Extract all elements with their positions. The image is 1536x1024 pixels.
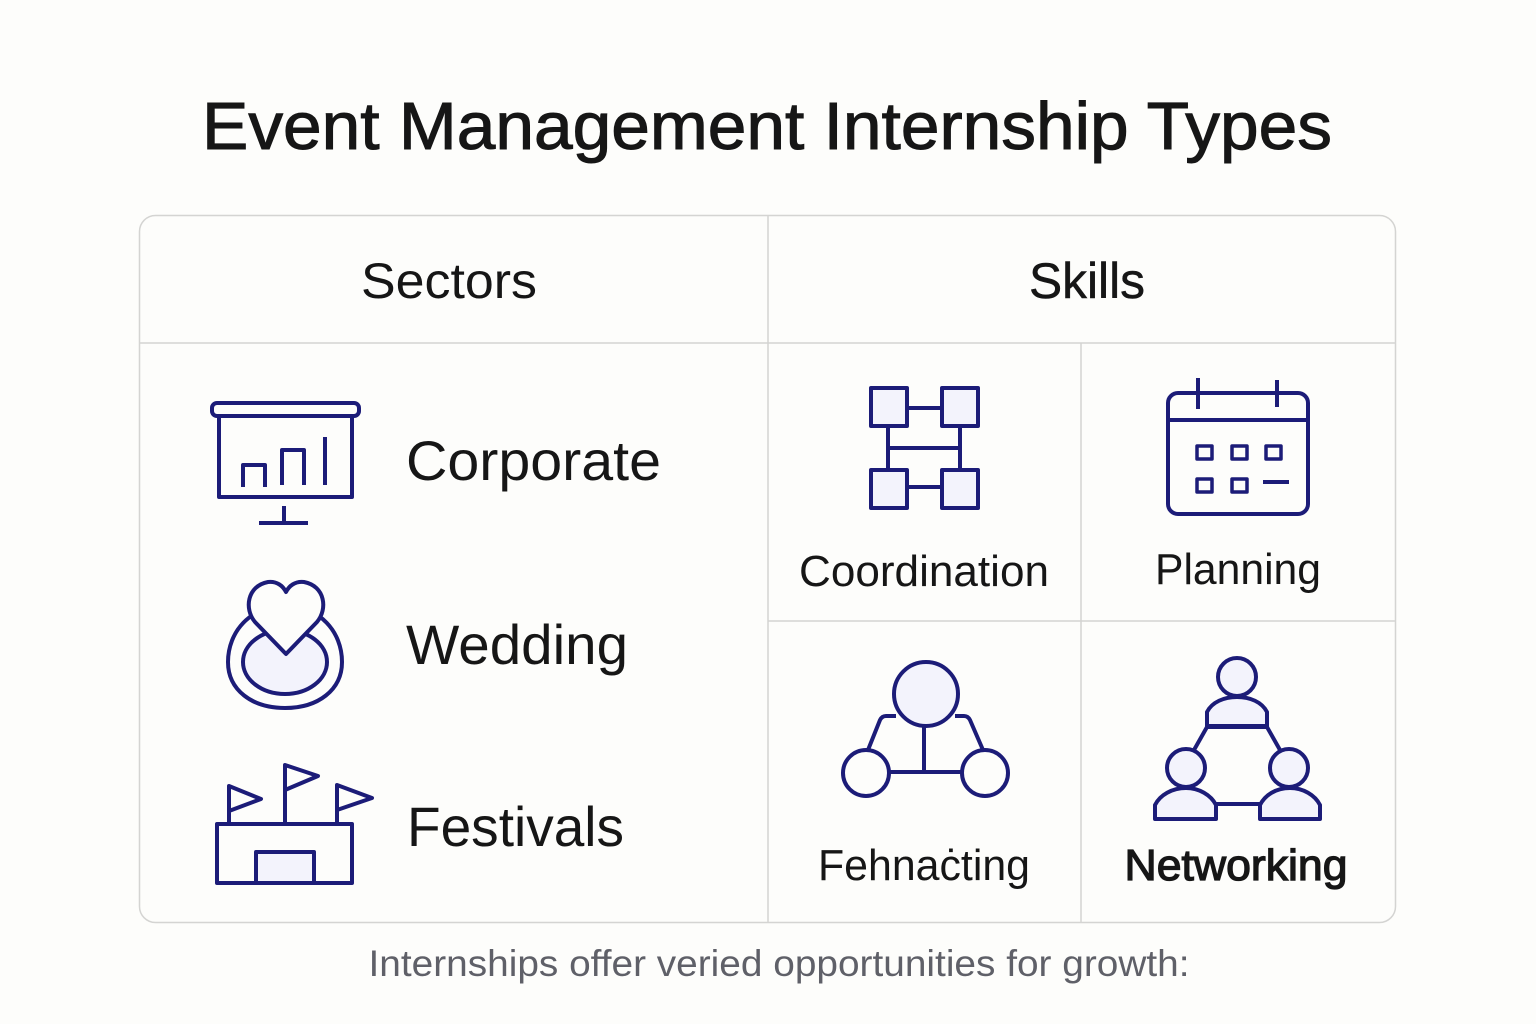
label: planning: Planning (1155, 545, 1321, 594)
label: networking: Networking (1124, 841, 1348, 890)
label: coordination: Coordination (799, 547, 1049, 596)
table panel (140, 216, 1396, 922)
icon: networking people triangle (1155, 658, 1320, 819)
label: corporate: Corporate (406, 429, 661, 492)
label: wedding: Wedding (406, 613, 628, 676)
icon: wedding ring with heart (228, 582, 342, 708)
icon: festival flags and stage (217, 765, 372, 883)
label: festivals: Festivals (407, 795, 624, 858)
icon: corporate presentation board (212, 403, 359, 523)
icon: coordination network squares (871, 388, 978, 508)
heading: skills: Skills (1029, 253, 1145, 309)
title: Event Management Internship Types (202, 89, 1332, 164)
caption: Internships offer veried opportunities for growth: (368, 943, 1190, 984)
icon: three connected circles (843, 662, 1008, 796)
icon: planning calendar (1168, 378, 1308, 514)
heading: sectors: Sectors (361, 253, 537, 309)
label: fehnacting: Fehnaċting (818, 841, 1030, 890)
